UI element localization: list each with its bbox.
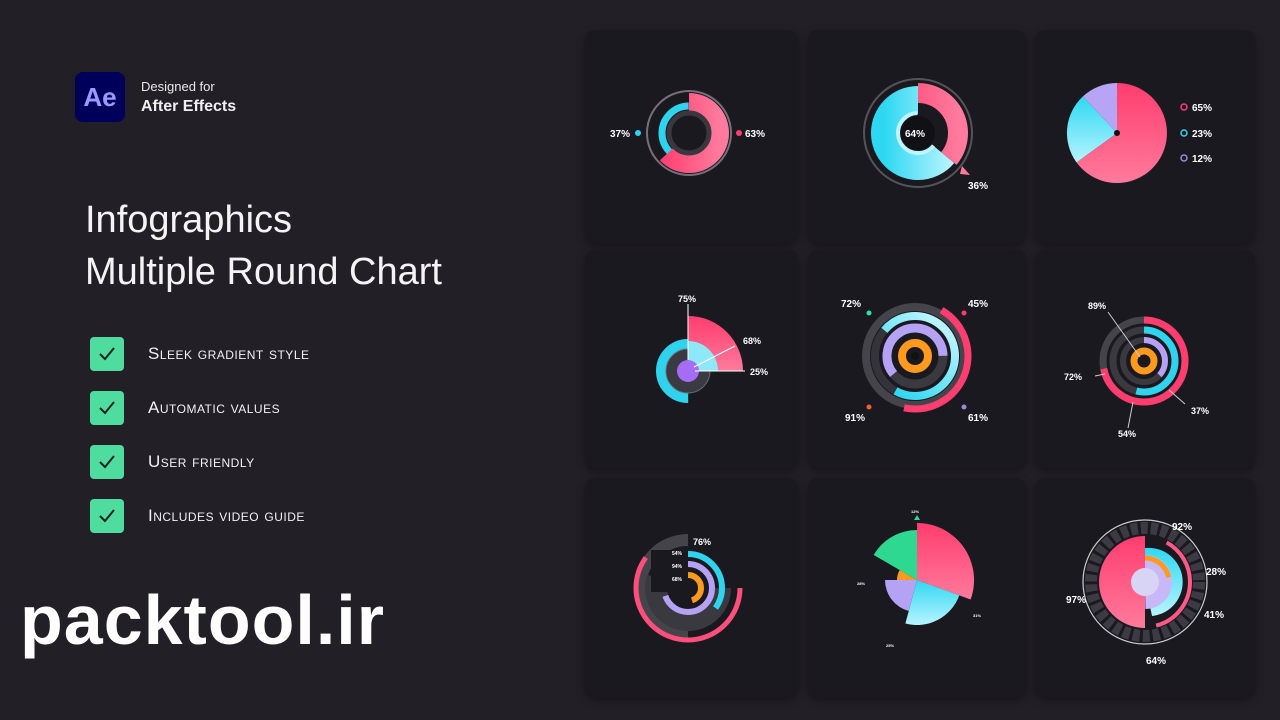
chart 4: radial sectors: 25% <box>750 367 768 377</box>
chart 7: half rings: 76% <box>693 537 711 547</box>
chart 2: donut 64/36: 64% <box>905 129 925 140</box>
chart 9: segmented ring: 41% <box>1204 610 1224 621</box>
chart 9: segmented ring <box>1066 520 1226 667</box>
chart 7: half rings: 68% <box>672 577 683 583</box>
chart 7: half rings <box>636 536 740 640</box>
chart 8: polar pie: 31% <box>973 613 981 618</box>
chart 4: radial sectors: 68% <box>743 336 761 346</box>
chart 8: polar pie: 25% <box>886 643 894 648</box>
logo: Ae: Ae <box>83 82 117 112</box>
chart 3: pie 65/23/12: 65% <box>1192 103 1212 114</box>
chart 9: segmented ring: 97% <box>1066 595 1086 606</box>
chart 6: concentric rings: 54% <box>1118 429 1136 439</box>
chart 4: radial sectors <box>661 294 768 398</box>
feature text 3: User friendly <box>148 452 255 471</box>
text: After Effects: After Effects <box>141 98 236 115</box>
title <box>85 199 442 293</box>
feature text 1: Sleek gradient style <box>148 344 310 363</box>
chart 7: half rings: 94% <box>672 564 683 570</box>
watermark: packtool.ir <box>20 581 385 659</box>
feature 3 <box>90 445 124 479</box>
title: Infographics <box>85 199 292 241</box>
chart 4: radial sectors: 75% <box>678 294 696 304</box>
title: Multiple Round Chart <box>85 251 442 293</box>
chart 8: polar pie: 28% <box>857 581 865 586</box>
chart 6: concentric rings: 89% <box>1088 301 1106 311</box>
chart 5: multi ring: 45% <box>968 299 988 310</box>
feature 1 <box>90 337 124 371</box>
chart 8: polar pie: 12% <box>911 509 919 514</box>
chart 1: donut 37/63 <box>610 91 765 175</box>
chart 2: donut 64/36: 36% <box>968 181 988 192</box>
text: designed for: Designed for <box>141 79 215 94</box>
chart 3: pie 65/23/12: 12% <box>1192 154 1212 165</box>
chart 1: donut 37/63: 63% <box>745 129 765 140</box>
feature 4 <box>90 499 124 533</box>
chart 1: donut 37/63: 37% <box>610 129 630 140</box>
feature text 2: Automatic values <box>148 398 280 417</box>
chart 5: multi ring <box>841 284 988 428</box>
chart 5: multi ring: 91% <box>845 413 865 424</box>
chart 6: concentric rings: 72% <box>1064 372 1082 382</box>
chart 7: half rings: 54% <box>672 551 683 557</box>
chart 9: segmented ring: 92% <box>1172 522 1192 533</box>
chart 9: segmented ring: 64% <box>1146 656 1166 667</box>
chart 8: polar pie <box>857 509 981 648</box>
chart 5: multi ring: 72% <box>841 299 861 310</box>
feature text 4: Includes video guide <box>148 506 305 525</box>
chart 3: pie 65/23/12 <box>1067 83 1212 183</box>
chart 6: concentric rings: 37% <box>1191 406 1209 416</box>
chart 6: concentric rings <box>1064 301 1209 439</box>
chart 9: segmented ring: 28% <box>1206 567 1226 578</box>
logo: Ae <box>75 72 125 122</box>
feature 2 <box>90 391 124 425</box>
chart 2: donut 64/36 <box>864 79 988 192</box>
chart 5: multi ring: 61% <box>968 413 988 424</box>
card backgrounds <box>585 30 798 243</box>
chart 3: pie 65/23/12: 23% <box>1192 129 1212 140</box>
